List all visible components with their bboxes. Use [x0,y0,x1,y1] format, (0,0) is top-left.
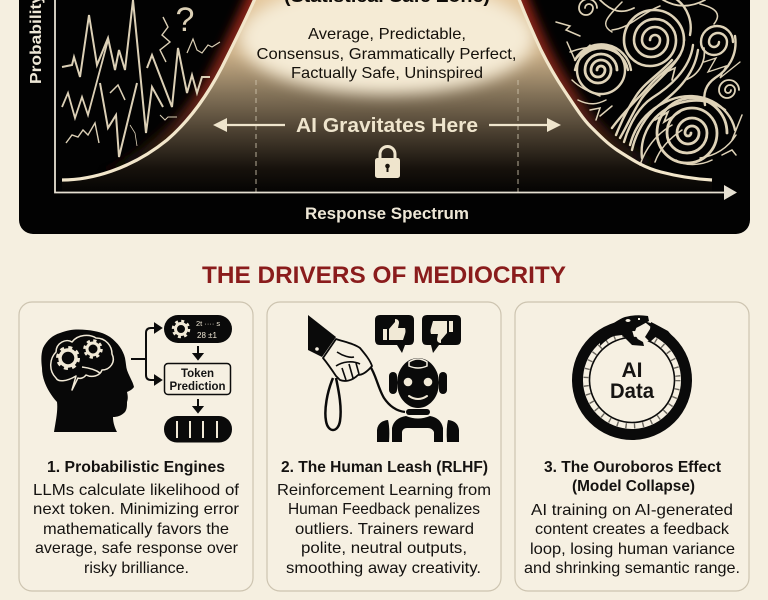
card text [277,459,491,577]
card text: next token. Minimizing error [33,501,240,518]
data pill: 2t ···· s [196,319,220,328]
axes [55,0,737,200]
card text: AI training on AI-generated [531,502,733,519]
panel: bell curve chart [19,0,750,234]
icon: head with brain and gears [41,329,134,432]
x axis label: Response Spectrum [305,204,469,223]
curve red glow [100,0,650,176]
card text: smoothing away creativity. [286,560,481,577]
token prediction box [164,364,230,394]
token prediction box: Token [181,368,214,380]
panel: ouroboros effect [515,302,749,591]
heading: THE DRIVERS OF MEDIOCRITY [202,262,566,289]
card text: average, safe response over [35,540,239,557]
panel: human leash [267,302,501,591]
card text: Reinforcement Learning from [277,482,491,499]
card text: polite, neutral outputs, [301,540,467,557]
AI gravitates label with arrows: AI Gravitates Here [296,115,478,137]
safe zone description: Factually Safe, Uninspired [291,65,483,82]
card text: mathematically favors the [43,521,229,538]
safe zone description [256,26,516,82]
panel: probabilistic engines [19,302,253,591]
icon: thumbs up bubble [375,315,414,353]
safe zone description: Average, Predictable, [308,26,466,43]
safe zone description: Consensus, Grammatically Perfect, [256,46,516,63]
output token pill [164,416,232,442]
card text: content creates a feedback [535,521,730,538]
chaotic low-probability squiggles [62,0,220,157]
question mark: ? [176,1,194,39]
card text [524,459,740,577]
icon: thumbs down bubble [422,315,461,353]
ouroboros label [610,359,654,403]
card text: and shrinking semantic range. [524,560,740,577]
card text: outliers. Trainers reward [295,521,474,538]
card text: loop, losing human variance [530,541,735,558]
card text: (Model Collapse) [572,478,695,495]
dashed boundary lines [256,80,518,192]
icon: hand holding leash [308,315,405,430]
ouroboros label: AI [622,359,642,382]
AI gravitates label with arrows [213,117,561,132]
flow connector arrows [131,324,202,412]
card text: 1. Probabilistic Engines [47,459,225,476]
card text: 3. The Ouroboros Effect [544,459,722,476]
icon: robot [377,358,459,442]
card text [33,459,240,577]
ouroboros label: Data [610,380,654,403]
card text: LLMs calculate likelihood of [33,482,240,499]
icon: padlock [375,147,400,178]
icon: ouroboros snake ring [578,315,686,434]
y axis label: Probability [28,0,45,84]
card text: risky brilliance. [84,560,189,577]
token prediction box: Prediction [170,381,226,393]
data pill: 28 ±1 [197,331,218,340]
safe zone fill under curve [60,0,720,192]
ornate swirls on right tail [556,0,742,165]
bell curve line [62,0,712,180]
card text: Human Feedback penalizes [288,501,480,518]
data pill [164,315,232,343]
card text: 2. The Human Leash (RLHF) [281,459,488,476]
